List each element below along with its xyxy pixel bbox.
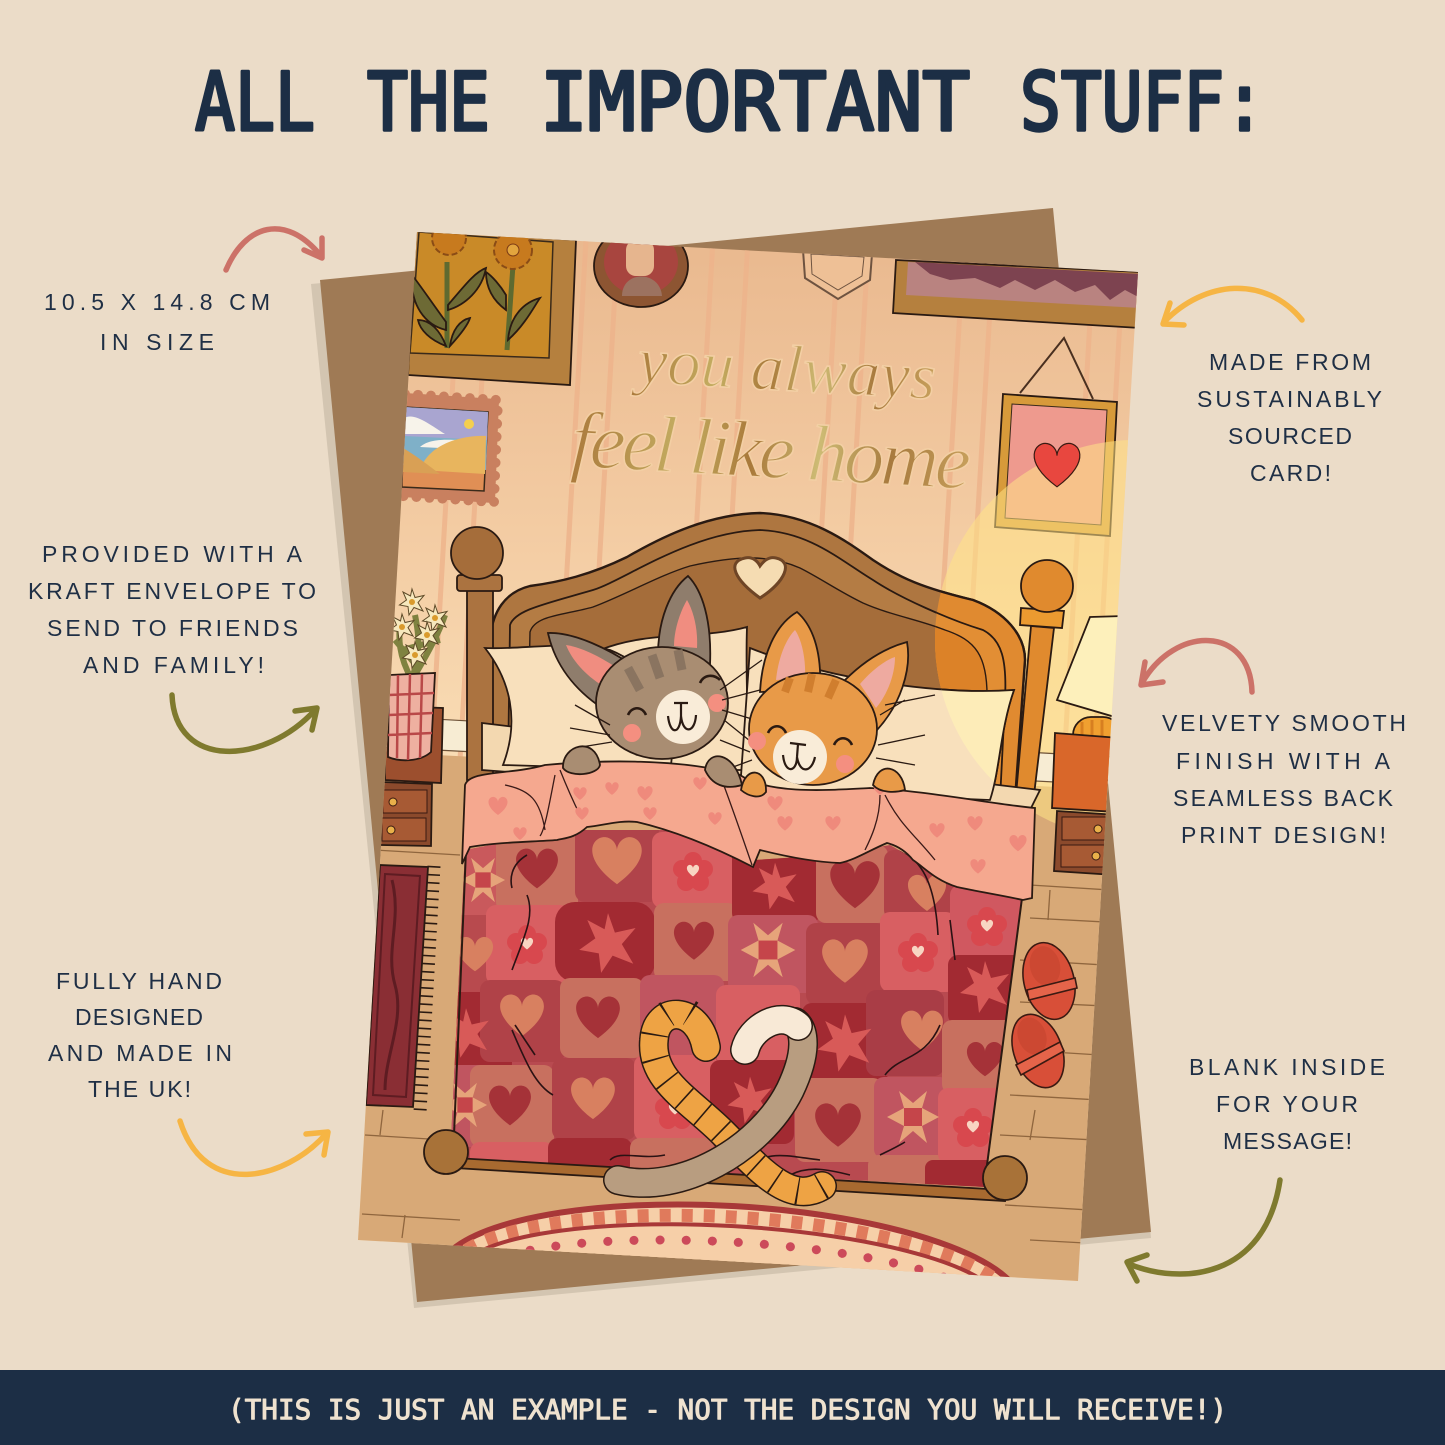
title: STUFF:: [1020, 56, 1265, 149]
text: envelope: SEND TO FRIENDS: [47, 615, 298, 641]
headboard lit by lamp: [935, 590, 1026, 786]
shield frame: [803, 250, 872, 299]
right bedpost: [1016, 560, 1073, 795]
footer banner: [0, 1370, 1445, 1445]
text: blank inside: [1189, 1054, 1385, 1154]
quilt motifs: [442, 837, 1009, 1147]
folded sheet: [462, 761, 1035, 900]
text: envelope: KRAFT ENVELOPE TO: [28, 578, 316, 604]
arrow: finish: [1141, 641, 1252, 692]
patchwork squares: [452, 832, 1020, 1187]
text: size: IN SIZE: [100, 329, 214, 355]
arrow: sustainable card: [1163, 288, 1302, 325]
text: finish: FINISH WITH A: [1176, 748, 1391, 774]
mattress: [482, 723, 1040, 810]
text: hand designed: [48, 968, 232, 1102]
text: hand designed: AND MADE IN: [48, 1040, 232, 1066]
text: envelope: [28, 541, 316, 678]
foil message: feel like home: [569, 396, 973, 507]
lamp: [1057, 616, 1125, 781]
pillows: [485, 627, 1014, 800]
text: finish: SEAMLESS BACK: [1173, 785, 1394, 811]
text: sustainable card: SUSTAINABLY: [1197, 386, 1382, 412]
headboard: [490, 513, 1025, 800]
kraft envelope: [311, 208, 1151, 1308]
text: blank inside: BLANK INSIDE: [1189, 1054, 1385, 1080]
grey cat: [548, 576, 762, 759]
oval portrait: [593, 242, 689, 308]
arrow: hand designed: [180, 1121, 328, 1174]
text: sustainable card: SOURCED: [1228, 423, 1352, 449]
pillow lit by lamp: [941, 688, 1016, 782]
text: blank inside: FOR YOUR: [1216, 1091, 1358, 1117]
text: envelope: AND FAMILY!: [83, 652, 264, 678]
text: finish: VELVETY SMOOTH: [1162, 710, 1406, 736]
heart painting frame: [995, 338, 1117, 536]
lamp glow: [942, 440, 1128, 824]
foil message: you always: [630, 324, 938, 414]
arrow: envelope: [172, 695, 317, 751]
scalloped landscape painting: [402, 394, 498, 502]
foil message: [570, 344, 970, 490]
title: THE: [367, 56, 490, 149]
intertwined tails: [618, 1010, 822, 1191]
text: sustainable card: [1197, 349, 1382, 486]
plant: [388, 589, 447, 760]
cat paws over sheet: [563, 746, 905, 796]
bed footboard: [424, 1130, 1027, 1201]
text: hand designed: FULLY HAND: [56, 968, 222, 994]
left bedpost: [451, 527, 503, 780]
slippers: [1011, 942, 1078, 1088]
text: size: [44, 289, 270, 355]
flower painting: [408, 221, 576, 385]
landscape painting: [893, 260, 1140, 328]
left nightstand: [380, 706, 443, 846]
title: [195, 56, 1265, 149]
text: size: 10.5 X 14.8 CM: [44, 289, 270, 315]
floor: [350, 752, 1115, 1290]
title: ALL: [195, 56, 315, 149]
text: sustainable card: MADE FROM: [1209, 349, 1371, 375]
text: finish: PRINT DESIGN!: [1181, 822, 1386, 848]
oval floor rug: [452, 1202, 1010, 1278]
text: envelope: PROVIDED WITH A: [42, 541, 303, 567]
text: finish: [1162, 710, 1406, 848]
quilt: [452, 830, 1023, 1187]
wallpaper stripes: [431, 240, 1123, 780]
text: hand designed: THE UK!: [88, 1076, 191, 1102]
orange cat: [720, 612, 935, 785]
skirting: [378, 716, 1115, 785]
greeting card: [358, 232, 1138, 1281]
title: IMPORTANT: [540, 56, 970, 149]
right nightstand: [1051, 732, 1110, 876]
text: hand designed: DESIGNED: [75, 1004, 203, 1030]
quilt folds: [511, 850, 955, 1175]
side rug: [366, 865, 434, 1112]
arrow: blank inside: [1127, 1180, 1280, 1281]
arrow: size: [226, 229, 322, 270]
footer banner: (THIS IS JUST AN EXAMPLE - NOT THE DESIGN YOU WILL RECEIVE!): [228, 1393, 1227, 1426]
text: blank inside: MESSAGE!: [1223, 1128, 1352, 1154]
text: sustainable card: CARD!: [1250, 460, 1331, 486]
heart in painting: [1034, 443, 1080, 487]
